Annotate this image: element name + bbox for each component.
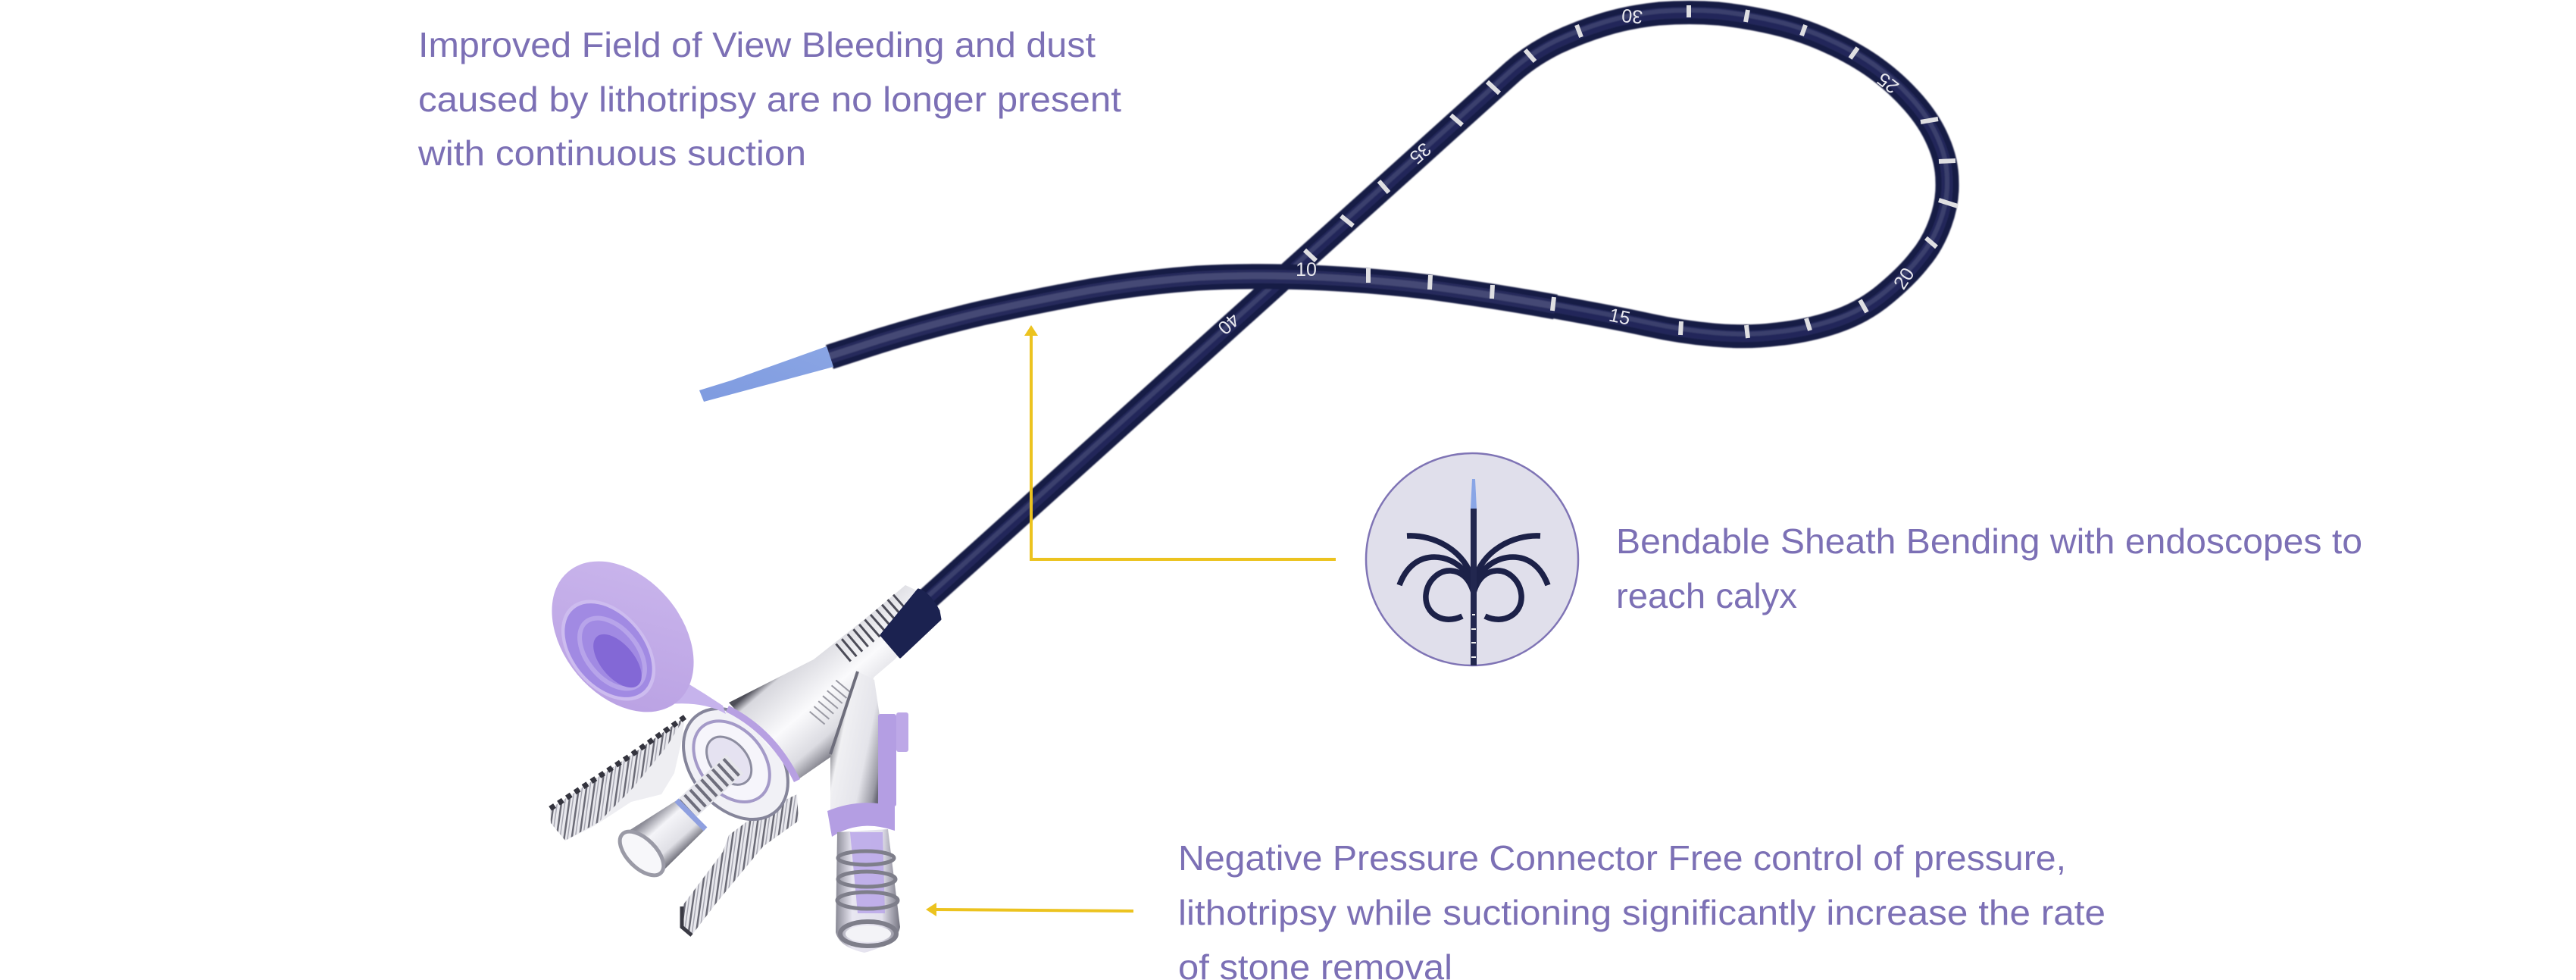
tube: depth numbers: 15 [1607,305,1632,330]
text block: negative pressure connector: lithotripsy while suctioning significantly increase the rate [1178,893,2106,932]
tube: blue tapered tip [699,346,833,402]
text block: improved field of view: Improved Field of View Bleeding and dust [418,25,1096,64]
handle: left ribbed grip [550,717,685,841]
handle: strain relief ribs [843,603,902,653]
icon: bending arcs [1399,536,1548,619]
handle: branch seam [830,672,858,754]
text block: improved field of view [417,25,1121,173]
handle: ribbed suction port [836,829,900,953]
handle: ring tab [523,534,726,740]
tube: depth numbers: 25 [1873,68,1903,98]
text block: bendable sheath [1616,521,2362,615]
text block: bendable sheath: reach calyx [1616,576,1797,615]
tube: loop and straight shaft [830,11,1947,609]
text block: improved field of view: caused by lithotripsy are no longer present [418,80,1121,119]
handle: luer port [612,764,735,883]
text block: negative pressure connector: Negative Pressure Connector Free control of pressure, [1178,838,2066,878]
handle: side suction branch [830,672,881,811]
tube: depth numbers: 40 [1214,308,1243,339]
callout arrow: bendable sheath [1024,325,1336,559]
connector handle [523,534,940,953]
tube: depth numbers: 30 [1621,5,1643,27]
handle: tapered glass body [729,585,939,779]
callout arrow: negative pressure connector [926,903,1133,916]
text block: bendable sheath: Bendable Sheath Bending with endoscopes to [1616,521,2362,561]
tube: depth numbers: 10 [1296,259,1317,280]
handle: purple collar band [727,709,797,781]
icon: central shaft [1471,509,1477,665]
icon: blue tip [1471,479,1477,509]
tube: depth numbers: 35 [1405,138,1435,168]
text block: negative pressure connector [1178,838,2106,980]
tube: depth numbers [1214,5,1919,339]
icon: sheath bending circle [1366,453,1578,665]
text block: improved field of view: with continuous suction [417,133,806,173]
handle: navy sleeve [881,590,940,657]
handle: body grip lines [817,686,844,719]
handle: glass flange disc [662,688,809,840]
tube: depth tick marks [1305,5,1958,338]
icon: shaft ticks [1471,615,1476,657]
handle: purple pressure clip [827,712,908,837]
sheath tube with depth markings [699,5,1958,609]
tube: depth numbers: 20 [1890,264,1919,293]
handle: lower ribbed grip [682,794,799,935]
